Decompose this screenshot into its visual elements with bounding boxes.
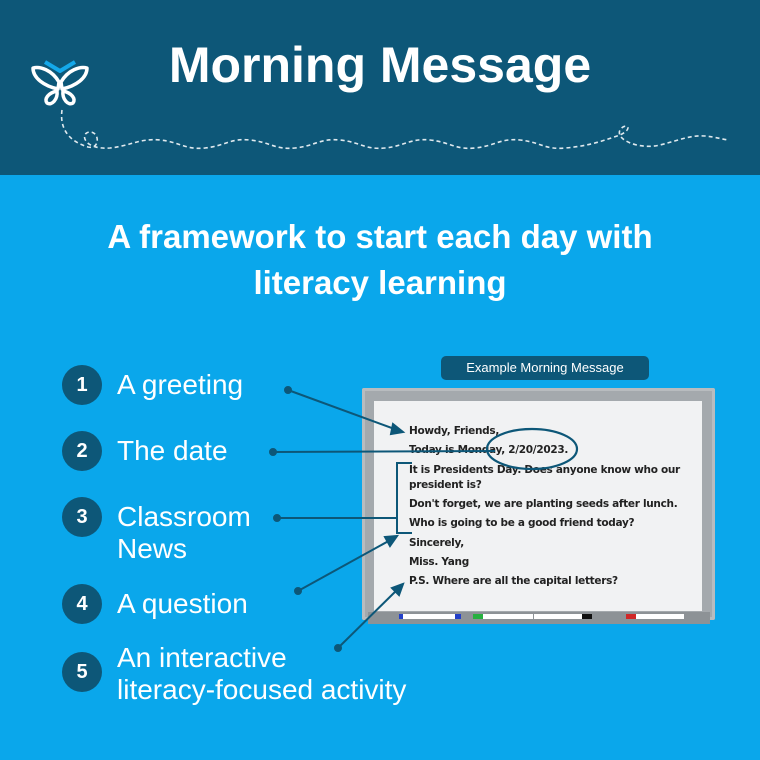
text: 5 xyxy=(76,661,88,683)
text: It is Presidents Day. Does anyone know who our xyxy=(409,464,680,476)
label: example morning message: Example Morning Message xyxy=(466,360,624,375)
text: Classroom xyxy=(117,501,251,532)
text: 2 xyxy=(76,440,88,462)
text: Today is Monday, 2/20/2023. xyxy=(409,444,568,456)
list item 1 xyxy=(62,365,243,405)
subtitle: literacy learning xyxy=(253,264,507,301)
text: A greeting xyxy=(117,369,243,400)
text: Miss. Yang xyxy=(409,556,469,568)
text: A question xyxy=(117,588,248,619)
list item 4 xyxy=(62,584,248,624)
title: Morning Message xyxy=(169,37,591,93)
text: Don't forget, we are planting seeds after lunch. xyxy=(409,498,677,510)
header band xyxy=(0,0,760,175)
list item 3 xyxy=(62,497,251,564)
text: 4 xyxy=(76,593,88,615)
text: The date xyxy=(117,435,228,466)
subtitle: A framework to start each day with xyxy=(107,218,653,255)
icon: butterfly with dashed flight path xyxy=(31,60,726,150)
list item 5 xyxy=(62,642,406,705)
text: president is? xyxy=(409,479,482,491)
text: News xyxy=(117,533,187,564)
list item 2 xyxy=(62,431,228,471)
text: P.S. Where are all the capital letters? xyxy=(409,575,618,587)
text: An interactive xyxy=(117,642,287,673)
text: Who is going to be a good friend today? xyxy=(409,517,634,529)
text: Howdy, Friends, xyxy=(409,425,499,437)
text: 1 xyxy=(76,374,88,396)
label: example morning message xyxy=(441,356,649,380)
text: Sincerely, xyxy=(409,537,464,549)
subtitle xyxy=(107,218,653,301)
text: literacy-focused activity xyxy=(117,674,406,705)
text: 3 xyxy=(76,506,88,528)
whiteboard xyxy=(362,388,715,624)
whiteboard text xyxy=(409,425,680,587)
